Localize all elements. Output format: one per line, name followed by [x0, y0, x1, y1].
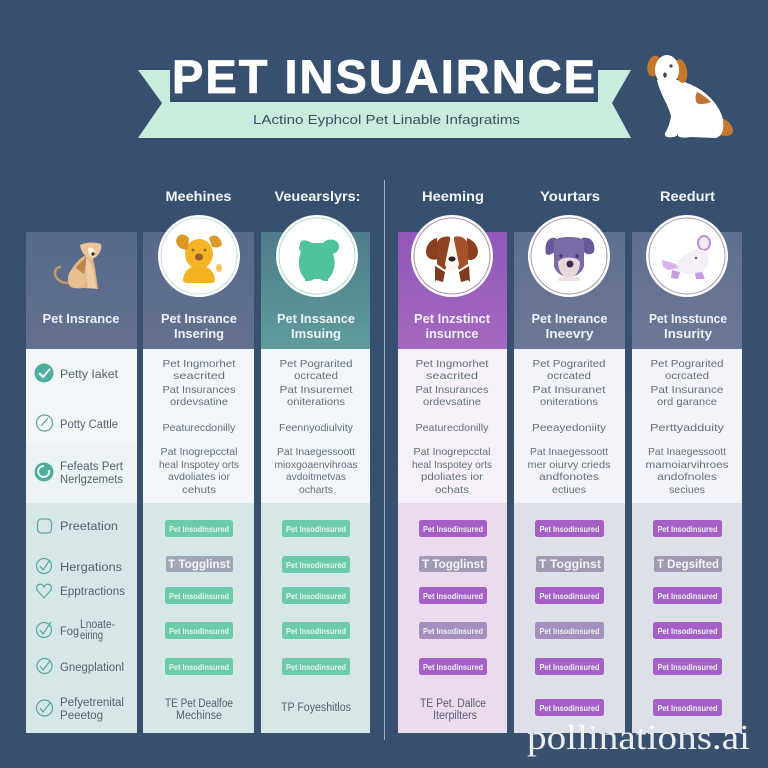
- head: [655, 55, 679, 85]
- label: pet insurance: Pet Insrance: [42, 312, 120, 326]
- text block: column 1 details: Pat Inogrepcctal: [160, 446, 238, 458]
- buttons: column 5: [653, 520, 722, 716]
- panel: column 4: [514, 215, 625, 733]
- buttons: column 4: Pet Insodinsured: [540, 662, 600, 672]
- text block: column 5 details: Pat Insurance: [650, 384, 724, 396]
- text block: column 4 details: [528, 358, 610, 496]
- divider: [384, 180, 386, 740]
- text block: column 2 details: ocrcated: [294, 370, 338, 382]
- ribbon: [138, 70, 631, 138]
- row: epptractions: [37, 584, 125, 598]
- watermark: pollinations.ai: [527, 718, 750, 757]
- row: pefyetrenital: [36, 697, 124, 722]
- label: column 2 title: [277, 312, 355, 341]
- heading: column 5: Reedurt: [660, 189, 716, 204]
- text block: column 1 footer: [165, 698, 233, 722]
- heading: column 4: Yourtars: [540, 189, 600, 204]
- text block: column 1 footer: Mechinse: [176, 710, 222, 722]
- text block: column 2 details: [274, 358, 358, 496]
- text block: column 2 details: Pet Pograrited: [280, 358, 353, 370]
- row: preetation: Preetation: [60, 521, 118, 533]
- text block: column 4 details: oniterations: [540, 396, 598, 408]
- icon: sitting dog: [645, 54, 733, 138]
- row: refeats pet: [34, 461, 124, 486]
- text block: column 1 footer: TE Pet Dealfoe: [165, 698, 233, 710]
- row: policy cable: [36, 415, 118, 431]
- text block: column 3 footer: [420, 698, 486, 722]
- text block: column 3 details: Pat Inogrepcctal: [414, 446, 490, 458]
- label: column 5 title: [649, 312, 727, 341]
- panel: features column: [26, 232, 137, 733]
- text block: column 1 details: ordevsatine: [170, 396, 228, 408]
- icon: yellow dog badge: [158, 215, 240, 297]
- text block: column 5 details: andofnoles: [657, 471, 717, 483]
- text block: column 5 details: Pat Inaegessoott: [648, 446, 726, 458]
- row: hergations: [36, 558, 122, 574]
- text block: column 4 details: Pat Inaegessoott: [530, 446, 608, 458]
- row: preetation: [38, 519, 118, 533]
- buttons: column 5: Pet Insodinsured: [658, 591, 718, 601]
- buttons: column 2: Pet Insodinsured: [286, 524, 346, 534]
- heading: column 1: Meehines: [166, 189, 232, 204]
- back spot: [696, 92, 711, 104]
- row: refeats pet: Nerlgzemets: [60, 474, 123, 486]
- buttons: column 5: Pet Insodinsured: [658, 703, 718, 713]
- text block: column 1 details: cehuts: [182, 484, 216, 496]
- row: gnegplation: [37, 658, 124, 674]
- icon: purple dog badge: [528, 215, 610, 297]
- buttons: column 2: Pet Insodinsured: [286, 662, 346, 672]
- row: gnegplation: Gnegplationl: [60, 662, 124, 674]
- ear left: [645, 54, 663, 78]
- column headings: [166, 189, 716, 204]
- text block: column 2 details: avdoitmetvas: [286, 471, 346, 483]
- label: column 5 title: Insurity: [664, 327, 712, 341]
- panel: column 1: [143, 215, 254, 733]
- text block: column 2 details: oniterations: [287, 396, 345, 408]
- row: fog loading: Lnoate-: [80, 619, 115, 631]
- text block: column 3 details: ordevsatine: [423, 396, 481, 408]
- buttons: column 3: Pet Insodinsured: [423, 626, 483, 636]
- icon: teal dog badge: [276, 215, 358, 297]
- buttons: column 4: Pet Insodinsured: [540, 703, 600, 713]
- buttons: column 1: Pet Insodinsured: [169, 662, 229, 672]
- buttons: column 3: Pet Insodinsured: [423, 662, 483, 672]
- heading: column 2: Veuearslyrs:: [274, 189, 360, 204]
- body: [657, 79, 723, 138]
- text block: column 5 details: seciues: [669, 484, 705, 496]
- label: column 3 title: [414, 312, 491, 341]
- text block: column 1 details: Pat Insurances: [162, 384, 236, 396]
- panel: column 3: [398, 215, 507, 733]
- text block: column 2 details: Pat Insuremet: [280, 384, 353, 396]
- text block: column 2 details: mioxgoaenvihroas: [274, 459, 358, 471]
- text block: column 3 details: heal Inspotey orts: [412, 459, 492, 471]
- buttons: column 1: [165, 520, 233, 675]
- row: policy basket: Petty Iaket: [60, 369, 119, 381]
- label: column 3 title: Pet Inzstinct: [414, 312, 491, 326]
- text block: column 3 details: ochats: [435, 484, 469, 496]
- buttons: column 3: T Togglinst: [422, 557, 484, 571]
- text block: column 2 details: ocharts: [299, 484, 333, 496]
- icon: lilac creature badge: [646, 215, 728, 297]
- text block: column 3 details: seacrited: [426, 370, 478, 382]
- row: fog loading: Fog: [60, 626, 79, 638]
- label: column 1 title: Pet Insrance: [161, 312, 237, 326]
- text block: column 4 details: Pat Insuranet: [532, 384, 606, 396]
- text block: column 5 details: Pet Pograrited: [650, 358, 724, 370]
- label: column 5 title: Pet Insstunce: [649, 312, 727, 326]
- label: column 2 title: Imsuing: [291, 327, 341, 341]
- heading: column 3: Heeming: [422, 189, 484, 204]
- buttons: column 1: T Togglinst: [168, 557, 230, 571]
- text block: column 1 details: Peaturecdonilly: [162, 422, 236, 434]
- buttons: column 3: [419, 520, 487, 675]
- text block: column 5 details: [646, 358, 728, 496]
- buttons: column 1: Pet Insodinsured: [169, 591, 229, 601]
- label: column 1 title: Insering: [174, 327, 224, 341]
- buttons: column 2: [282, 520, 350, 675]
- buttons: column 5: Pet Insodinsured: [658, 662, 718, 672]
- buttons: column 4: Pet Insodinsured: [540, 626, 600, 636]
- label: column 2 title: Pet Inssance: [277, 312, 355, 326]
- buttons: column 3: Pet Insodinsured: [423, 524, 483, 534]
- text block: column 4 details: Peeayedoniity: [532, 422, 607, 434]
- text block: column 3 details: Pet Ingmorhet: [416, 358, 489, 370]
- text block: column 4 details: Pet Pograrited: [532, 358, 606, 370]
- row: hergations: Hergations: [60, 562, 122, 574]
- panel: column 5: [632, 215, 742, 733]
- label: column 4 title: Ineevry: [546, 327, 594, 341]
- icon: tan dog: [55, 243, 101, 289]
- label: column 4 title: [532, 312, 608, 341]
- text block: column 1 details: avdoliates ior: [168, 471, 230, 483]
- row: fog loading: eiring: [80, 630, 103, 642]
- title banner: [138, 50, 631, 138]
- text block: column 4 details: andfonotes: [539, 471, 599, 483]
- buttons: column 4: T Togginst: [539, 557, 601, 571]
- tail: [718, 118, 733, 136]
- text block: column 5 details: ocrcated: [665, 370, 709, 382]
- buttons: column 4: [535, 520, 604, 716]
- buttons: column 1: Pet Insodinsured: [169, 524, 229, 534]
- buttons: column 3: Pet Insodinsured: [423, 591, 483, 601]
- buttons: column 2: Pet Insodinsured: [286, 560, 346, 570]
- text block: column 1 details: seacrited: [173, 370, 225, 382]
- text block: column 2 footer: TP Foyeshitlos: [281, 702, 351, 714]
- text block: column 3 details: [412, 358, 492, 496]
- text block: column 1 details: [159, 358, 239, 496]
- text block: column 4 details: mer oiurvy crieds: [528, 459, 610, 471]
- text block: column 5 details: ord garance: [657, 396, 717, 408]
- text block: column 4 details: ectiues: [552, 484, 586, 496]
- text block: column 3 details: Peaturecdonilly: [416, 422, 489, 434]
- label: column 4 title: Pet Inerance: [532, 312, 608, 326]
- buttons: column 5: T Degsifted: [657, 557, 719, 571]
- text block: column 3 details: pdoliates ior: [421, 471, 484, 483]
- panel: column 2: [261, 215, 370, 733]
- text block: column 1 details: Pet Ingmorhet: [162, 358, 236, 370]
- label: column 1 title: [161, 312, 237, 341]
- buttons: column 5: Pet Insodinsured: [658, 524, 718, 534]
- buttons: column 1: Pet Insodinsured: [169, 626, 229, 636]
- text block: column 3 footer: TE Pet. Dallce: [420, 698, 486, 710]
- text block: column 3 footer: Iterpilters: [433, 710, 477, 722]
- buttons: column 2: Pet Insodinsured: [286, 626, 346, 636]
- ear right: [673, 58, 689, 84]
- row: pefyetrenital: Peeetog: [60, 710, 103, 722]
- row: policy basket: [34, 364, 119, 382]
- buttons: column 4: Pet Insodinsured: [540, 524, 600, 534]
- text block: column 5 details: mamoiarvihroes: [646, 459, 728, 471]
- row: fog loading: [36, 619, 115, 642]
- subtitle: LActino Eyphcol Pet Linable Infagratims: [253, 112, 521, 127]
- buttons: column 2: Pet Insodinsured: [286, 591, 346, 601]
- buttons: column 5: Pet Insodinsured: [658, 626, 718, 636]
- text block: column 5 details: Perttyadduity: [650, 422, 725, 434]
- text block: column 2 details: Pat Inaegessoott: [277, 446, 355, 458]
- title: PET INSUAIRNCE: [172, 50, 595, 103]
- row: policy cable: Potty Cattle: [60, 419, 118, 431]
- row: pefyetrenital: Pefyetrenital: [60, 697, 124, 709]
- text block: column 2 details: Feennyodiulvity: [279, 422, 354, 434]
- text block: column 4 details: ocrcated: [547, 370, 591, 382]
- label: column 3 title: insurnce: [426, 327, 479, 341]
- row: epptractions: Epptractions: [60, 586, 125, 598]
- row: refeats pet: Fefeats Pert: [60, 461, 124, 473]
- buttons: column 4: Pet Insodinsured: [540, 591, 600, 601]
- icon: brown dog badge: [411, 215, 493, 297]
- text block: column 1 details: heal Inspotey orts: [159, 459, 239, 471]
- text block: column 3 details: Pat Insurances: [416, 384, 488, 396]
